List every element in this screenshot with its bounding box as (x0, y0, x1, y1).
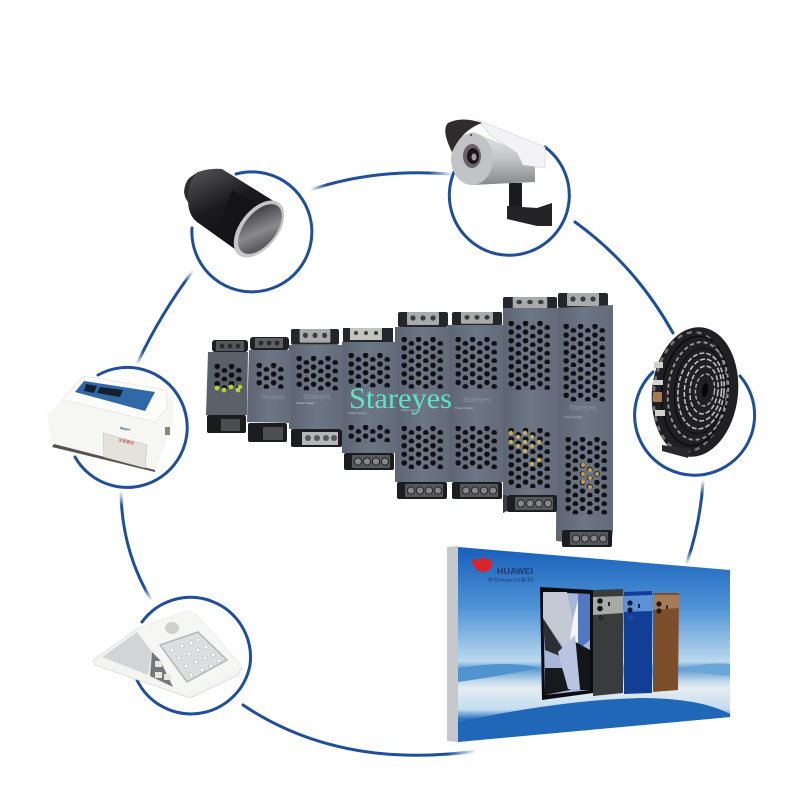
icon: white controller box (47, 376, 173, 472)
LED panel (160, 632, 227, 682)
power supply 3 (289, 329, 343, 447)
icon: solar wall light (93, 611, 242, 698)
panel frame (447, 546, 458, 742)
power supply 8: Stareyes (569, 405, 597, 412)
arc: LED strip circle (635, 372, 755, 475)
icon: security camera (445, 120, 552, 226)
brand mark: Mayer (120, 426, 131, 432)
power supply 3: Power Supply (296, 401, 315, 405)
blue display panel (75, 381, 155, 411)
Huawei logo: HUAWEI (497, 566, 533, 576)
power supply 5: Power Supply (401, 408, 420, 412)
warning label (103, 433, 147, 468)
power supply lineup (206, 293, 613, 547)
link: camera to LED strip (575, 222, 673, 333)
power supply 6: Stareyes (463, 397, 491, 404)
link: lens to camera (310, 173, 450, 190)
power supply 8 (556, 293, 613, 547)
power supply 2: Stareyes (261, 395, 285, 401)
panel picture (458, 547, 730, 742)
link: controller to lens (138, 272, 192, 362)
bracket (509, 183, 522, 210)
power supply 4: Power Supply (348, 411, 367, 415)
grey phone (593, 589, 623, 696)
power supply 1 (206, 340, 248, 433)
watermark: Stareyes: Stareyes (349, 382, 452, 415)
power supply 3: Stareyes (303, 394, 331, 401)
hood (478, 120, 545, 168)
power supply 8: Power Supply (564, 415, 583, 419)
icon: white controller box: 注意事项 (118, 436, 135, 446)
Huawei logo (472, 556, 533, 584)
display panel: Huawei lightbox (447, 546, 730, 745)
power supply 4 (342, 328, 397, 470)
camera lens (463, 144, 481, 168)
brown phone (653, 593, 679, 692)
arc: controller circle (75, 367, 187, 487)
blue phone (624, 591, 652, 694)
front phone (540, 587, 593, 700)
power supply 7 (503, 297, 558, 513)
power supply 5 (395, 312, 449, 499)
Huawei logo: 华为Mate10系列 (487, 576, 533, 584)
power supply 6: Power Supply (455, 406, 474, 410)
power supply 6 (448, 312, 503, 499)
arc: camera circle (449, 147, 569, 255)
link: solar light to controller (121, 493, 150, 598)
link: display panel to solar light (243, 705, 477, 755)
side LEDs (150, 652, 173, 687)
camera body (472, 131, 535, 185)
icon: LED strip coil (645, 323, 745, 461)
link: LED strip to display panel (687, 482, 703, 562)
connection ring: blue arcs and circles (75, 147, 755, 755)
power supply 2 (247, 337, 291, 442)
icon: black camera lens (184, 169, 294, 267)
arc: lens circle (192, 172, 312, 292)
arc: solar light circle (137, 597, 250, 714)
sensor (165, 622, 179, 634)
